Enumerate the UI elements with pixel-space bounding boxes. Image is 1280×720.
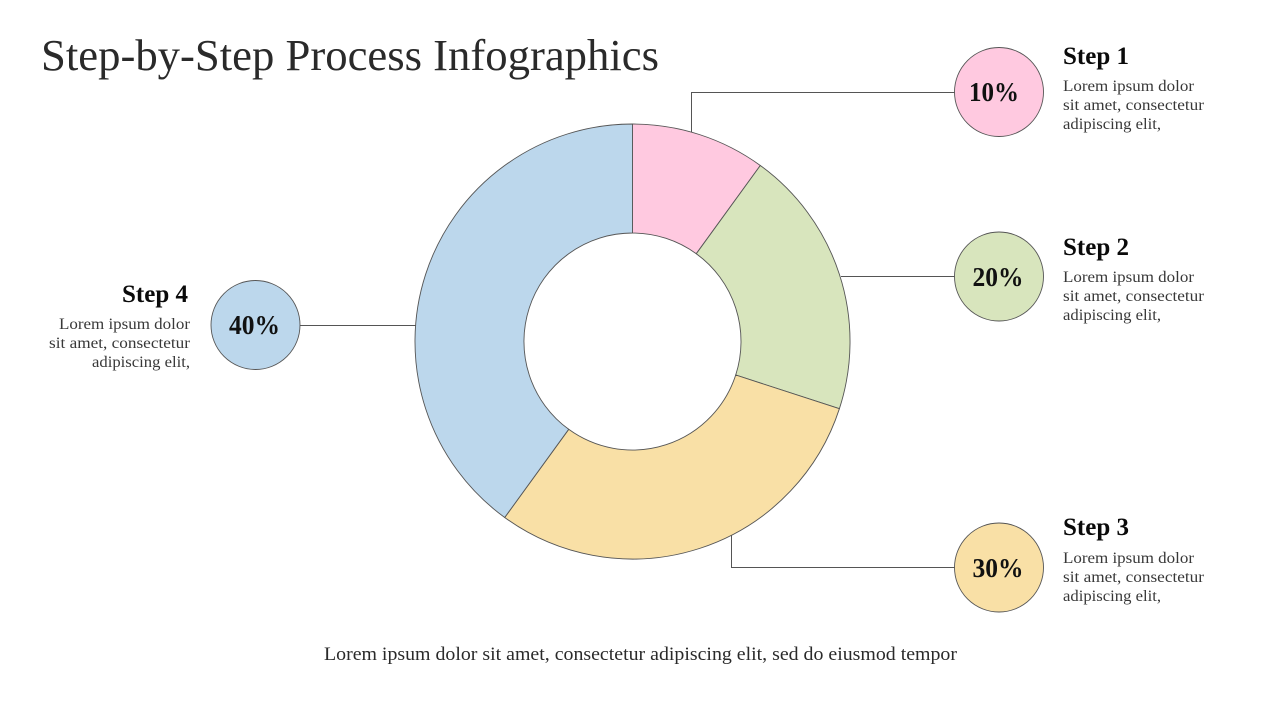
text block: step 4 (49, 281, 191, 371)
donut chart (415, 124, 850, 559)
badge: step 3 30% (954, 523, 1044, 612)
badge: step 3 30%: 30% (972, 553, 1024, 583)
connector: step 1 (692, 92, 955, 133)
text block: step 3: adipiscing elit, (1063, 588, 1161, 605)
text block: step 3: Lorem ipsum dolor (1063, 550, 1195, 567)
text block: step 1: Step 1 (1063, 43, 1129, 70)
text block: step 2: adipiscing elit, (1063, 307, 1161, 324)
connector: step 3 (732, 535, 955, 568)
text block: step 1: sit amet, consectetur (1063, 97, 1205, 114)
text block: step 3 (1063, 514, 1205, 605)
text block: step 1: Lorem ipsum dolor (1063, 78, 1195, 95)
segment: 30% (505, 375, 839, 559)
badge: step 4 40%: 40% (229, 310, 280, 340)
badge: step 1 10% (954, 48, 1044, 136)
text block: step 2: sit amet, consectetur (1063, 288, 1205, 305)
text block: step 2: Step 2 (1063, 234, 1129, 261)
footer caption: Lorem ipsum dolor sit amet, consectetur adipiscing elit, sed do eiusmod tempor (324, 644, 958, 665)
text block: step 3: sit amet, consectetur (1063, 569, 1205, 586)
segment: 10% (632, 124, 760, 254)
segment: 20% (696, 166, 850, 409)
badge: step 2 20% (954, 232, 1044, 321)
text block: step 2 (1063, 234, 1205, 324)
connector: step 4 (299, 324, 416, 326)
connector: step 2 (841, 276, 955, 278)
badge: step 1 10%: 10% (969, 77, 1019, 107)
text block: step 1 (1063, 43, 1205, 133)
text block: step 2: Lorem ipsum dolor (1063, 269, 1195, 286)
segment: 40% (415, 124, 632, 517)
text block: step 4: Lorem ipsum dolor (59, 316, 191, 333)
badge: step 4 40% (211, 280, 300, 370)
title: Step-by-Step Process Infographics (41, 31, 659, 80)
text block: step 4: Step 4 (122, 281, 188, 308)
text block: step 4: adipiscing elit, (92, 354, 190, 371)
badge: step 2 20%: 20% (972, 262, 1024, 292)
text block: step 1: adipiscing elit, (1063, 116, 1161, 133)
text block: step 3: Step 3 (1063, 514, 1129, 541)
text block: step 4: sit amet, consectetur (49, 335, 191, 352)
